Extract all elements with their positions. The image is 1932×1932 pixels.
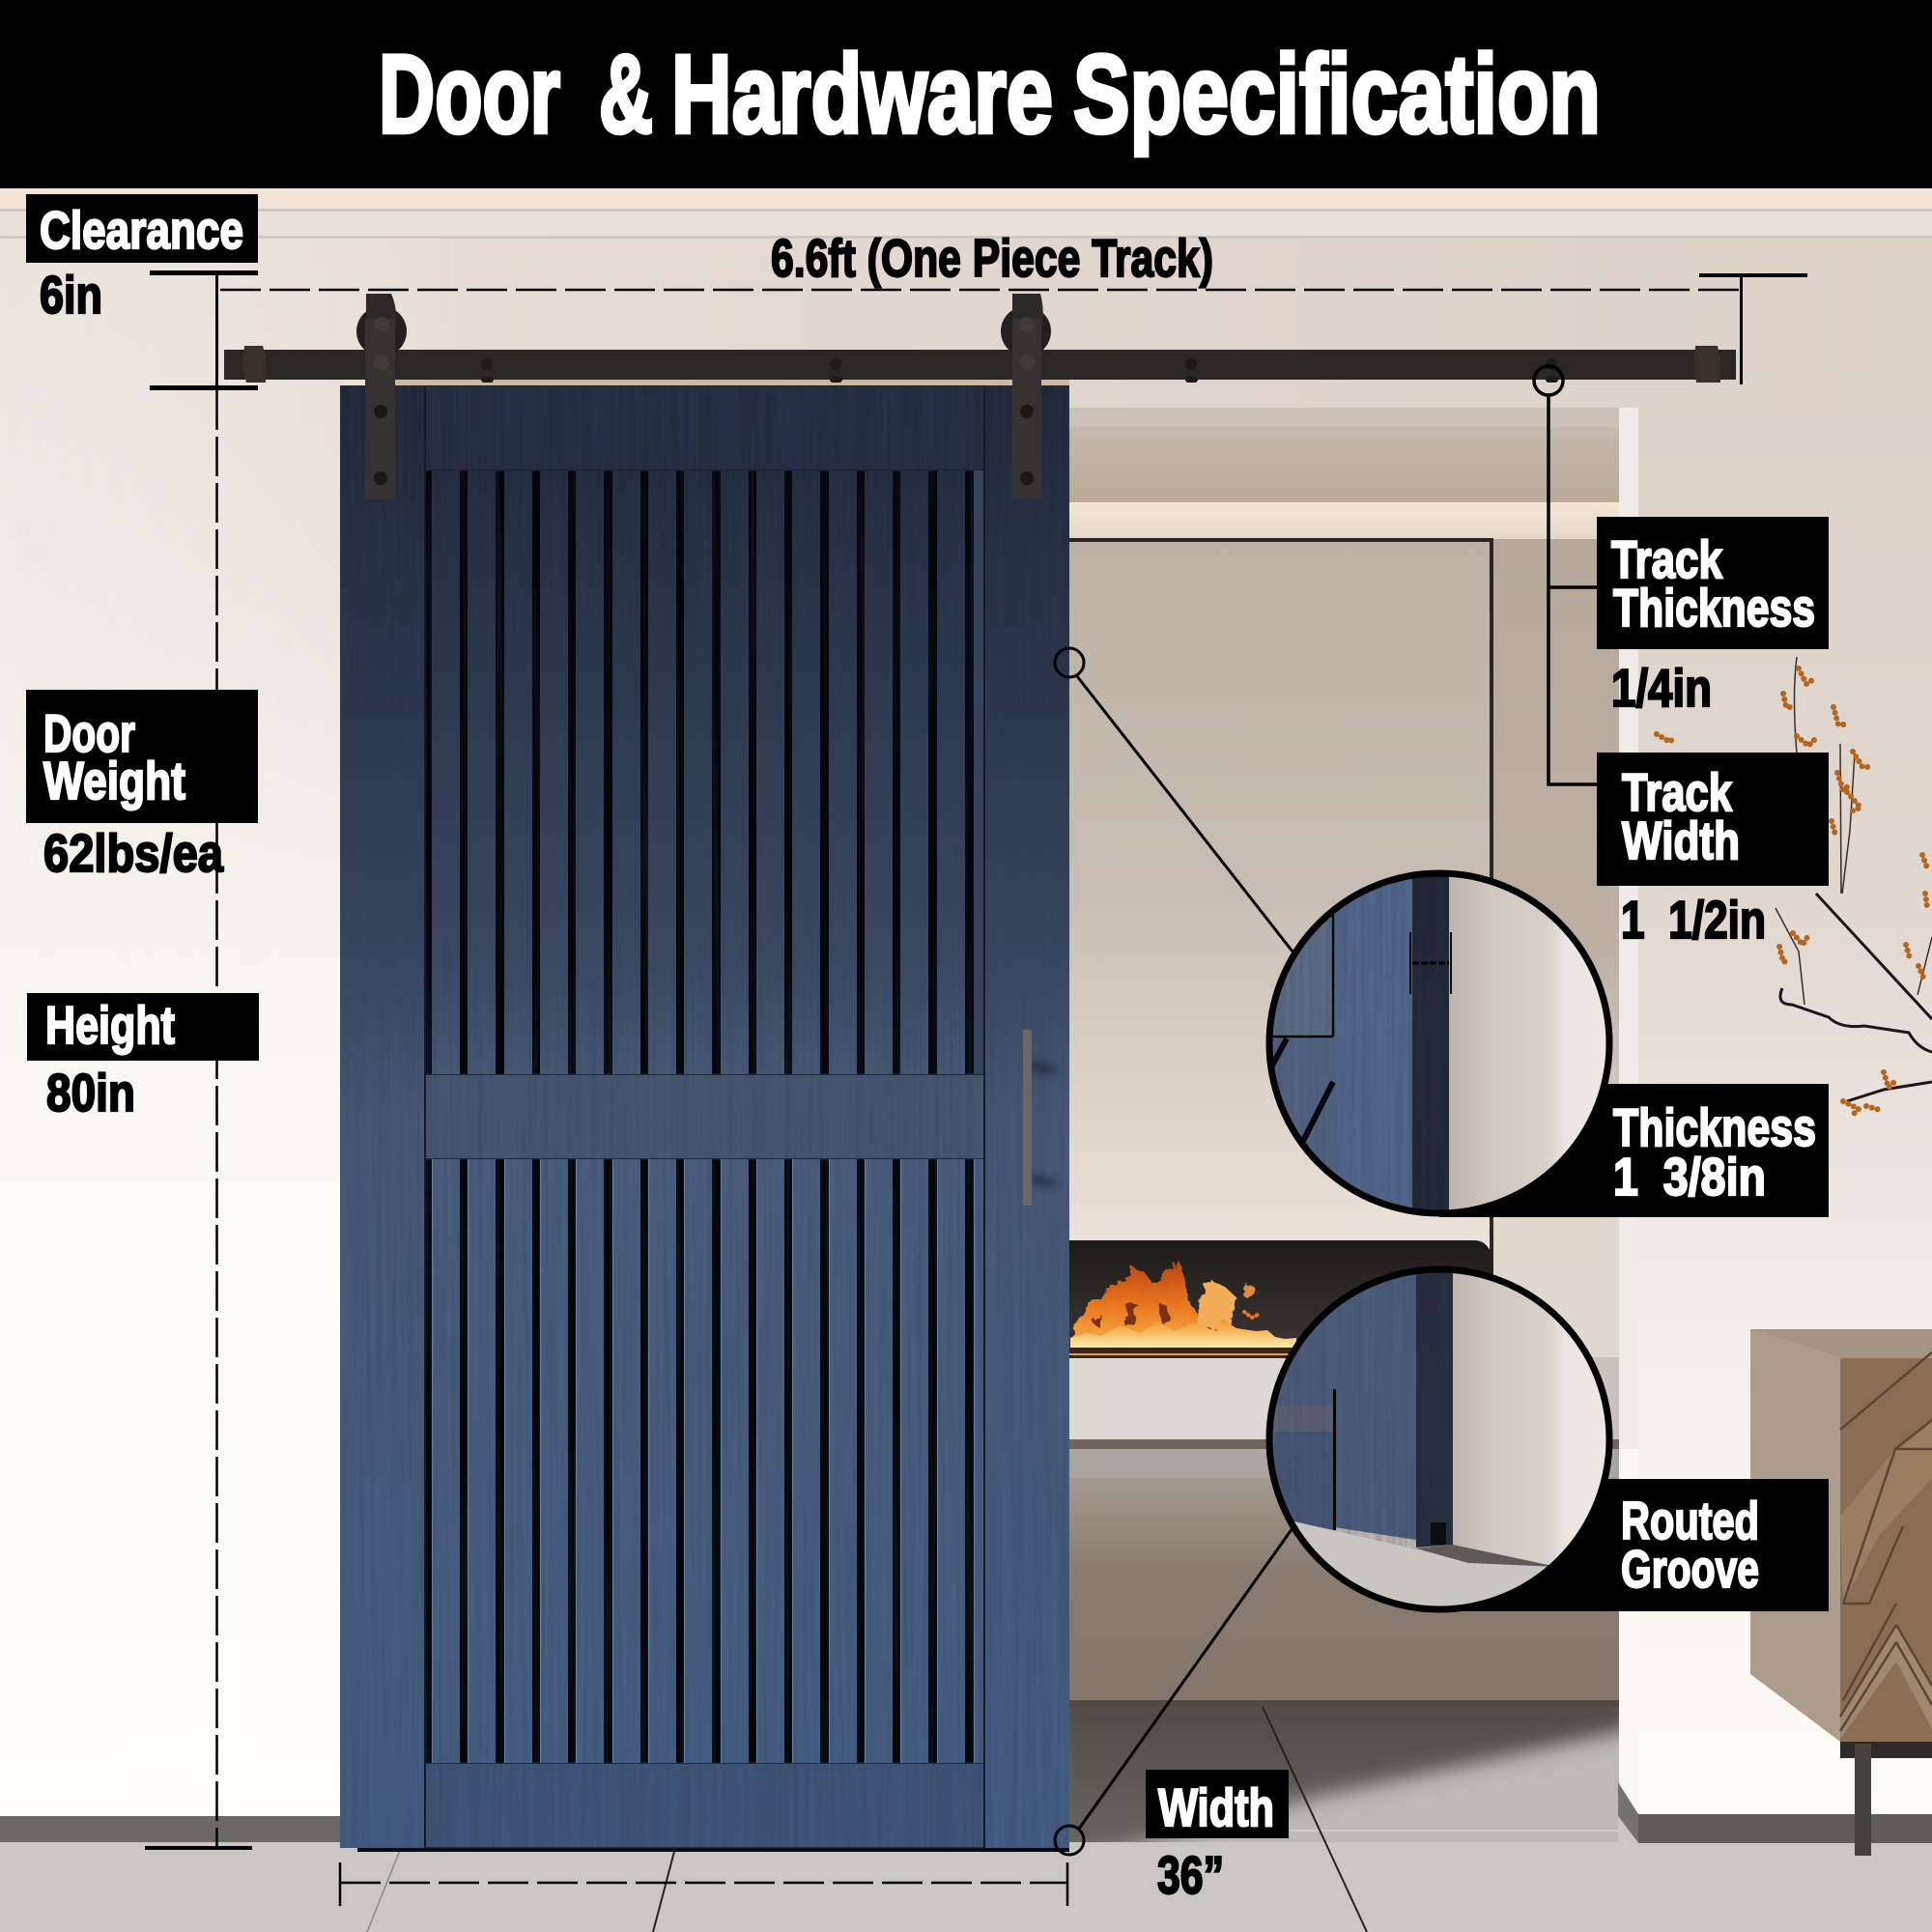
top rail <box>425 385 984 470</box>
track bolts <box>481 358 1558 383</box>
title: Hardware <box>671 33 1053 156</box>
label: routed groove: Groove <box>1621 1539 1759 1599</box>
value: width: 36” <box>1157 1845 1224 1905</box>
label: door weight <box>26 690 258 823</box>
width dimension line <box>340 1862 1067 1906</box>
callout leader: track <box>1534 366 1597 784</box>
door <box>340 385 1069 1852</box>
label: thickness: 1 3/8in <box>1613 1147 1766 1207</box>
value: track thickness: 1/4in <box>1611 658 1712 718</box>
value: door weight: 62lbs/ea <box>43 823 223 883</box>
hanger strap left <box>356 294 407 499</box>
detail circle: door thickness <box>1265 869 1613 1217</box>
lower slats <box>432 1159 965 1763</box>
title: & <box>599 33 653 156</box>
label: routed groove: Routed <box>1621 1491 1759 1550</box>
label: door weight: Weight <box>43 751 185 810</box>
title: Specification <box>1073 33 1601 156</box>
hanger strap right <box>1001 294 1051 498</box>
right end stop <box>1694 346 1720 383</box>
label: track thickness: Track <box>1611 529 1722 589</box>
left end stop <box>242 346 266 383</box>
sideboard <box>1750 1329 1932 1856</box>
label: door weight: Door <box>43 703 135 763</box>
fireplace <box>1069 1240 1492 1358</box>
label: height <box>27 993 259 1061</box>
back wall panel frame <box>1069 540 1492 1275</box>
track length dimension <box>220 273 1807 384</box>
value: track width: 1 1/2in <box>1621 890 1766 950</box>
label: clearance: Clearance <box>40 200 243 260</box>
detail circle: routed groove <box>1265 1265 1613 1613</box>
wood grain <box>340 385 1069 1848</box>
label: track width <box>1597 753 1829 886</box>
label: width: Width <box>1158 1777 1274 1837</box>
upper slats <box>432 470 965 1074</box>
label: track thickness: Thickness <box>1613 578 1815 638</box>
clearance dimension <box>150 270 258 390</box>
door handle <box>1023 1030 1056 1206</box>
track length label: 6.6ft (One Piece Track) <box>771 228 1213 288</box>
label: thickness <box>1439 1084 1829 1217</box>
title: Door <box>379 33 560 156</box>
value: clearance: 6in <box>40 265 102 325</box>
label: track thickness <box>1597 517 1829 649</box>
icon: flames <box>1070 1262 1296 1348</box>
height dimension line <box>145 390 252 1850</box>
label: thickness: Thickness <box>1613 1097 1816 1157</box>
value: height: 80in <box>46 1063 135 1122</box>
middle rail <box>425 1074 984 1159</box>
decorative branches with berries <box>1657 657 1932 1115</box>
label: track width: Track <box>1622 762 1732 822</box>
label: track width: Width <box>1622 810 1740 870</box>
bottom rail <box>425 1763 984 1848</box>
label: routed groove <box>1439 1479 1829 1611</box>
sliding track <box>224 346 1736 385</box>
callout leader: door thickness <box>1055 648 1293 952</box>
title banner <box>0 0 1932 188</box>
callout leader: routed groove <box>1055 1528 1293 1855</box>
label: height: Height <box>45 995 175 1055</box>
